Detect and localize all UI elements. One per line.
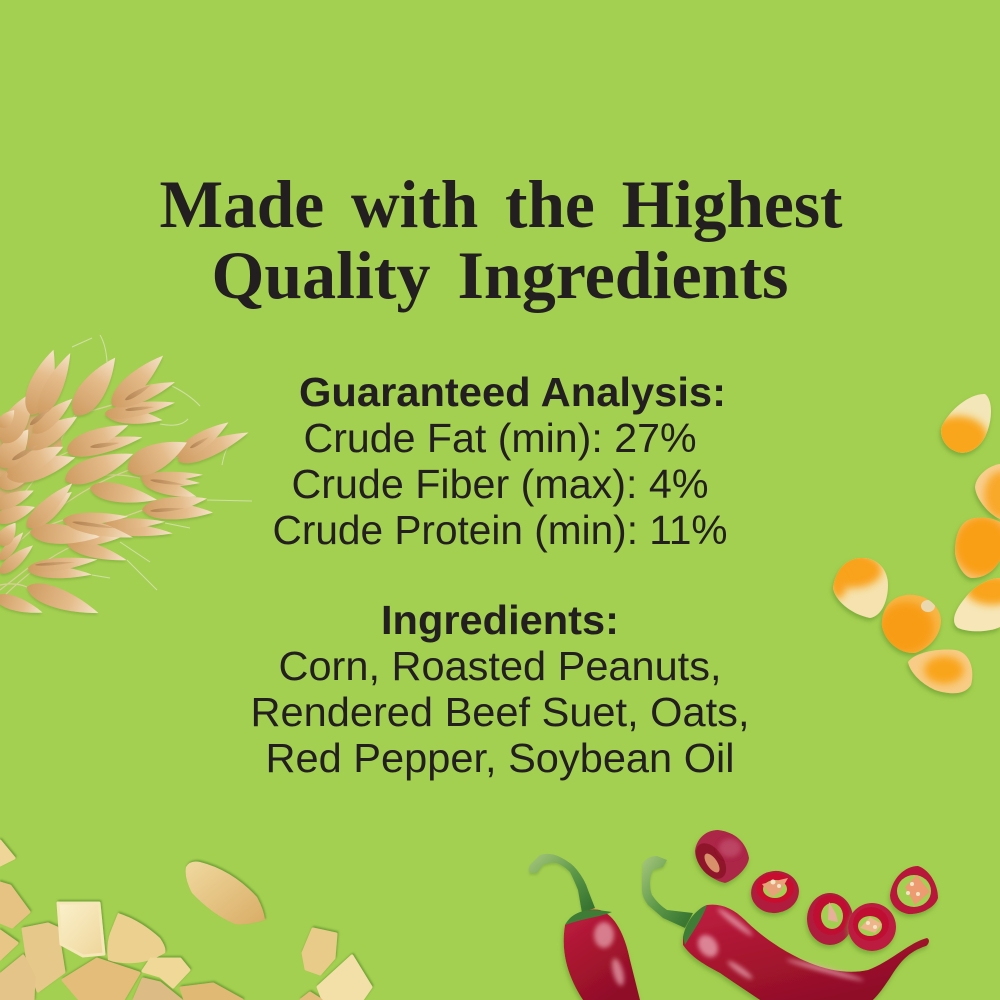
ingredients text block: Corn, Roasted Peanuts, bbox=[278, 643, 722, 689]
right chili calyx bbox=[683, 905, 707, 945]
right chili pepper bbox=[683, 905, 929, 1000]
pepper ring 1 bbox=[748, 868, 802, 916]
corn kernel 3 bbox=[950, 514, 1000, 582]
illustration: peanuts bbox=[0, 841, 371, 1000]
guaranteed analysis text block: Guaranteed Analysis: bbox=[299, 369, 726, 415]
pepper ring 3 bbox=[848, 903, 896, 951]
ingredients text block: Red Pepper, Soybean Oil bbox=[266, 735, 734, 781]
guaranteed analysis text block bbox=[272, 369, 728, 553]
guaranteed analysis text block: Crude Fat (min): 27% bbox=[304, 415, 696, 461]
corn kernel 5 bbox=[830, 558, 889, 622]
title bbox=[160, 166, 843, 313]
right chili stem bbox=[642, 856, 693, 928]
ingredients text block: Ingredients: bbox=[381, 597, 619, 643]
illustration: oat sprig bbox=[0, 335, 252, 622]
pepper ring 4 bbox=[890, 866, 938, 914]
corn kernel 4 bbox=[948, 575, 1000, 635]
ingredients text block: Rendered Beef Suet, Oats, bbox=[250, 689, 750, 735]
illustration: corn kernels bbox=[822, 388, 1000, 696]
ingredients text block bbox=[250, 597, 750, 781]
left chili calyx bbox=[565, 910, 612, 925]
illustration: red chili peppers bbox=[529, 830, 938, 1000]
title: Made with the Highest bbox=[160, 166, 843, 242]
guaranteed analysis text block: Crude Fiber (max): 4% bbox=[292, 461, 708, 507]
pepper ring 2 bbox=[807, 893, 853, 945]
corn kernel 2 bbox=[972, 464, 1000, 522]
corn kernel 7 bbox=[905, 646, 975, 696]
corn kernel 1 bbox=[938, 394, 992, 458]
title: Quality Ingredients bbox=[212, 237, 788, 313]
guaranteed analysis text block: Crude Protein (min): 11% bbox=[272, 507, 728, 553]
corn kernel 6 bbox=[878, 592, 943, 655]
left chili stem bbox=[529, 854, 595, 913]
pepper chunk bbox=[690, 830, 749, 884]
peanut: whole half bbox=[186, 862, 265, 924]
backing mass of dense grains bbox=[0, 400, 62, 510]
left chili pepper bbox=[564, 910, 640, 1000]
